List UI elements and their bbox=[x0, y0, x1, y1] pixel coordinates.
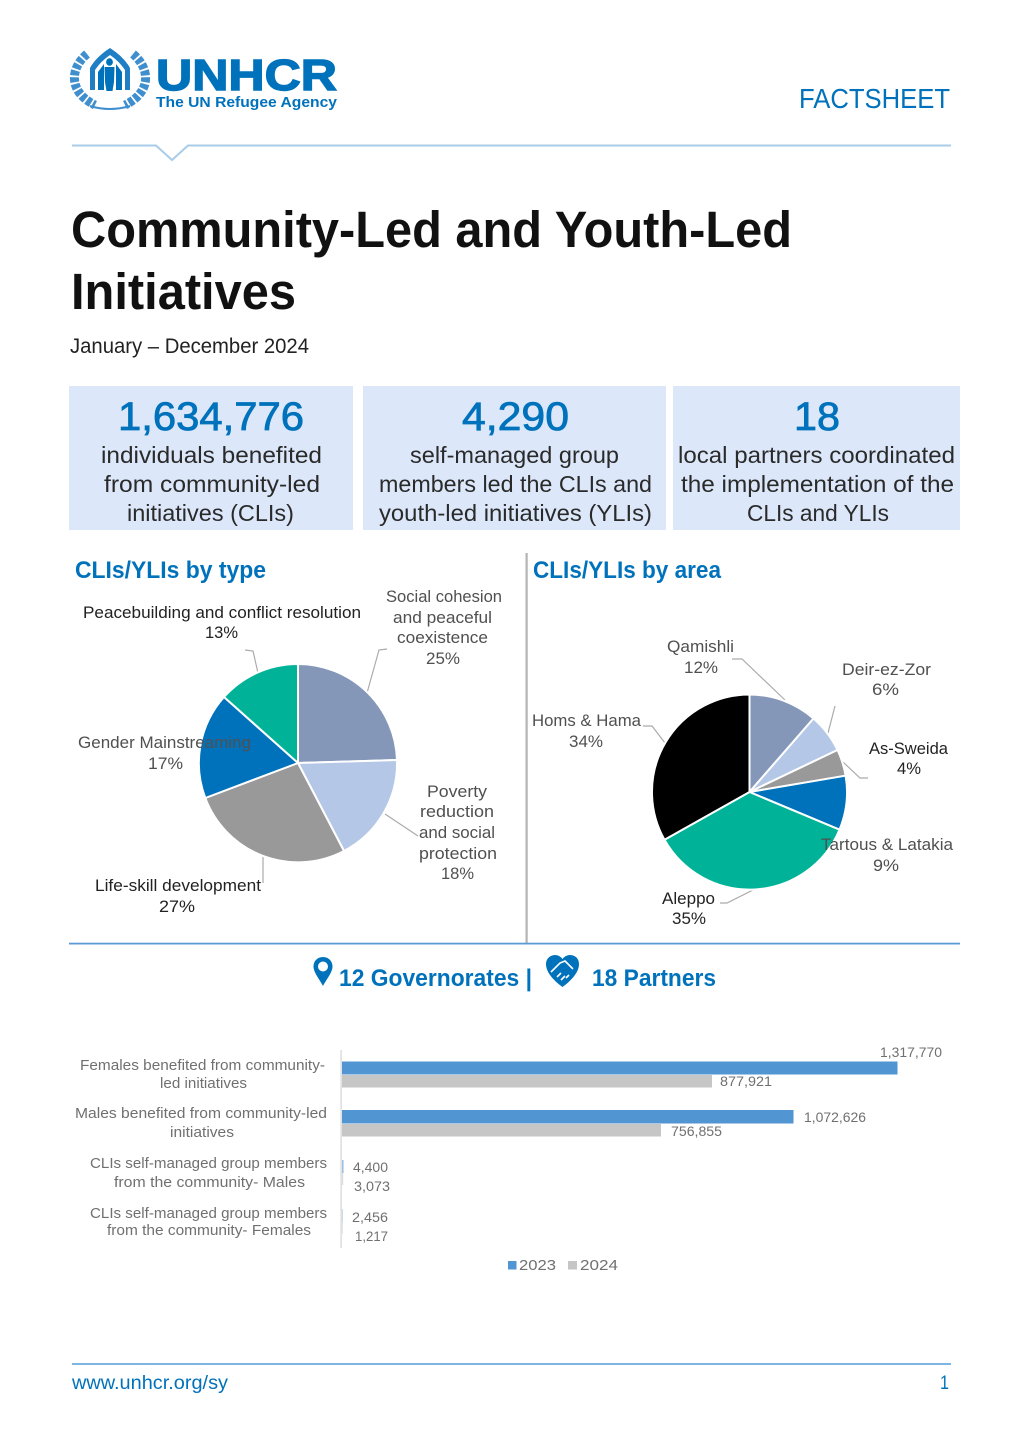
category labels: from the community- Males bbox=[114, 1174, 305, 1191]
label: gender mainstreaming: 17% bbox=[148, 754, 183, 773]
category labels: CLIs self-managed group members bbox=[90, 1155, 327, 1172]
label: Tartous and Latakia: 9% bbox=[873, 856, 899, 875]
panel: individuals benefited: 1,634,776 bbox=[118, 395, 304, 439]
label: poverty reduction: and social bbox=[419, 823, 495, 842]
value labels: 4,400 bbox=[353, 1159, 388, 1175]
title bbox=[71, 201, 792, 320]
panel: individuals benefited: individuals benefited bbox=[101, 442, 322, 468]
icon: UNHCR emblem bbox=[74, 48, 146, 109]
legend: 2023 bbox=[519, 1257, 556, 1274]
title: Community-Led and Youth-Led bbox=[71, 201, 792, 258]
panel: local partners: CLIs and YLIs bbox=[747, 500, 889, 526]
bars: CLI members bbox=[342, 1160, 344, 1234]
label: poverty reduction: Poverty bbox=[427, 782, 488, 801]
label: Aleppo bbox=[662, 889, 715, 928]
label: life-skill development bbox=[95, 876, 261, 916]
panel: local partners bbox=[673, 386, 960, 530]
label: As-Sweida: As-Sweida bbox=[869, 739, 949, 758]
label: Homs and Hama: Homs & Hama bbox=[532, 711, 642, 730]
heading: by type: CLIs/YLIs by type bbox=[75, 557, 266, 584]
label: life-skill development: 27% bbox=[159, 897, 195, 916]
icon: location pin bbox=[314, 957, 332, 986]
panel: individuals benefited: initiatives (CLIs) bbox=[127, 500, 294, 526]
label: As-Sweida: 4% bbox=[897, 759, 921, 778]
pie chart: by type bbox=[78, 587, 502, 916]
category labels: from the community- Females bbox=[107, 1222, 311, 1239]
label: Qamishli bbox=[667, 637, 734, 677]
footer url: www.unhcr.org/sy bbox=[71, 1373, 229, 1394]
label: As-Sweida bbox=[869, 739, 949, 778]
icon: handshake heart bbox=[546, 955, 579, 987]
value labels: 2,456 bbox=[352, 1209, 388, 1225]
partners count: 18 Partners bbox=[592, 965, 716, 992]
label: poverty reduction: reduction bbox=[420, 802, 494, 821]
value labels bbox=[352, 1044, 942, 1244]
governorates count: 12 Governorates | bbox=[339, 965, 532, 992]
label: poverty reduction: protection bbox=[419, 844, 497, 863]
category labels: Males benefited from community-led bbox=[75, 1105, 327, 1122]
date range: January – December 2024 bbox=[70, 335, 309, 358]
category labels: Females benefited from community- bbox=[80, 1057, 325, 1074]
label: peacebuilding bbox=[83, 603, 361, 642]
value labels: 1,217 bbox=[355, 1228, 388, 1244]
panel: group members: youth-led initiatives (YLIs) bbox=[379, 500, 652, 526]
panel: local partners: local partners coordinated bbox=[678, 442, 955, 468]
panel: group members: members led the CLIs and bbox=[379, 471, 652, 497]
value labels: 877,921 bbox=[720, 1073, 772, 1089]
panel: group members: 4,290 bbox=[462, 395, 569, 439]
heading: by area: CLIs/YLIs by area bbox=[533, 557, 722, 584]
logo tagline: The UN Refugee Agency bbox=[156, 94, 338, 111]
factsheet label: FACTSHEET bbox=[799, 83, 950, 114]
category labels: initiatives bbox=[170, 1124, 234, 1141]
label: Deir-ez-Zor: Deir-ez-Zor bbox=[842, 660, 931, 679]
label: poverty reduction bbox=[419, 782, 497, 883]
label: social cohesion: and peaceful bbox=[393, 608, 492, 627]
value labels: 1,072,626 bbox=[804, 1109, 866, 1125]
label: Aleppo: Aleppo bbox=[662, 889, 715, 908]
UNHCR logo bbox=[74, 48, 338, 111]
label: Tartous and Latakia bbox=[821, 835, 954, 875]
label: poverty reduction: 18% bbox=[441, 864, 474, 883]
label: peacebuilding: 13% bbox=[205, 623, 238, 642]
logo wordmark: UNHCR bbox=[156, 51, 337, 100]
label: Qamishli: Qamishli bbox=[667, 637, 734, 656]
category labels: CLIs self-managed group members bbox=[90, 1205, 327, 1222]
label: life-skill development: Life-skill development bbox=[95, 876, 261, 895]
legend bbox=[508, 1257, 618, 1274]
label: Homs and Hama bbox=[532, 711, 642, 751]
value labels: 756,855 bbox=[671, 1123, 722, 1139]
label: Tartous and Latakia: Tartous & Latakia bbox=[821, 835, 954, 854]
legend: 2024 bbox=[580, 1257, 618, 1274]
page number: 1 bbox=[940, 1373, 949, 1394]
pie chart: by area bbox=[532, 637, 954, 928]
value labels: 3,073 bbox=[354, 1178, 390, 1194]
label: gender mainstreaming bbox=[78, 733, 251, 773]
label: Homs and Hama: 34% bbox=[569, 732, 603, 751]
panel: local partners: 18 bbox=[794, 395, 840, 439]
value labels: 1,317,770 bbox=[880, 1044, 942, 1060]
panel: local partners: the implementation of the bbox=[681, 471, 954, 497]
bars: males benefited bbox=[342, 1110, 794, 1136]
label: Deir-ez-Zor: 6% bbox=[872, 680, 899, 699]
title: Initiatives bbox=[71, 263, 296, 320]
label: peacebuilding: Peacebuilding and conflict resolution bbox=[83, 603, 361, 622]
panel: group members: self-managed group bbox=[410, 442, 619, 468]
panel: individuals benefited: from community-led bbox=[104, 471, 320, 497]
label: Deir-ez-Zor bbox=[842, 660, 931, 699]
panel: group members bbox=[363, 386, 666, 530]
label: social cohesion: 25% bbox=[426, 649, 460, 668]
label: gender mainstreaming: Gender Mainstreaming bbox=[78, 733, 251, 752]
category labels bbox=[75, 1057, 327, 1239]
label: Qamishli: 12% bbox=[684, 658, 718, 677]
label: Aleppo: 35% bbox=[672, 909, 706, 928]
label: social cohesion: Social cohesion bbox=[386, 587, 502, 606]
category labels: led initiatives bbox=[160, 1075, 247, 1092]
label: social cohesion: coexistence bbox=[397, 628, 488, 647]
panel: individuals benefited bbox=[69, 386, 353, 530]
bar chart: beneficiaries 2023 vs 2024 bbox=[75, 1044, 942, 1274]
label: social cohesion bbox=[386, 587, 502, 668]
bars: females benefited bbox=[342, 1062, 898, 1088]
